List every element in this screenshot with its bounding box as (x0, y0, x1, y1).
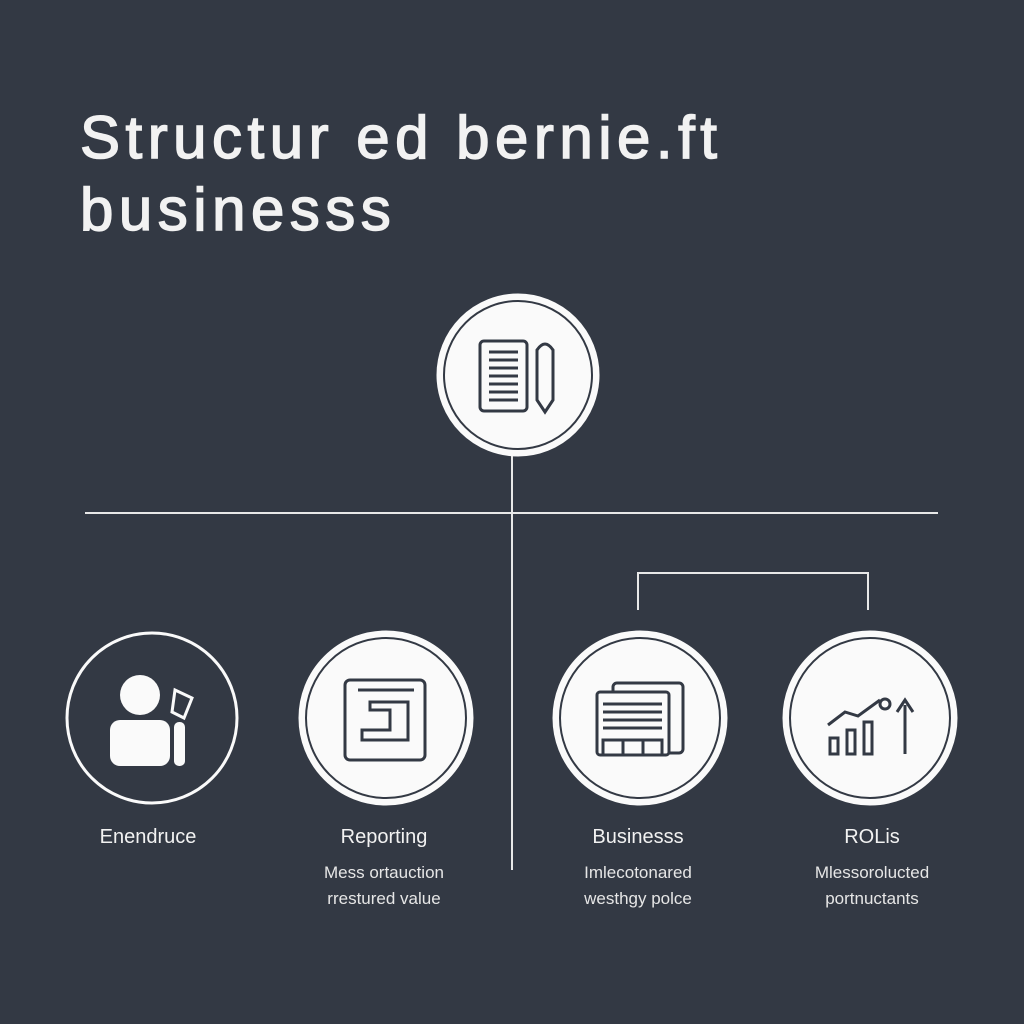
icon: top document circle (438, 295, 598, 455)
icon: reporting circle (300, 632, 472, 804)
title (80, 104, 722, 243)
icon: person circle (67, 633, 237, 803)
connector lines (85, 455, 938, 870)
icon: business circle (554, 632, 726, 804)
title: businesss (80, 176, 396, 243)
icon: ROI chart circle (784, 632, 956, 804)
text: business desc: Imlecotonared (584, 863, 692, 882)
text: business desc: westhgy polce (584, 889, 692, 908)
text: reporting desc: Mess ortauction (324, 863, 444, 882)
text: ROI desc: portnuctants (825, 889, 919, 908)
label: Reporting: Reporting (341, 826, 427, 848)
title: Structur ed bernie.ft (80, 104, 722, 171)
text: ROI desc (815, 863, 929, 908)
label: Business: Businesss (592, 826, 684, 848)
label: ROLis: ROLis (844, 826, 900, 848)
text: reporting desc (324, 863, 444, 908)
text: reporting desc: rrestured value (327, 889, 441, 908)
label: Enendruce: Enendruce (100, 826, 196, 848)
text: business desc (584, 863, 692, 908)
text: ROI desc: Mlessorolucted (815, 863, 929, 882)
